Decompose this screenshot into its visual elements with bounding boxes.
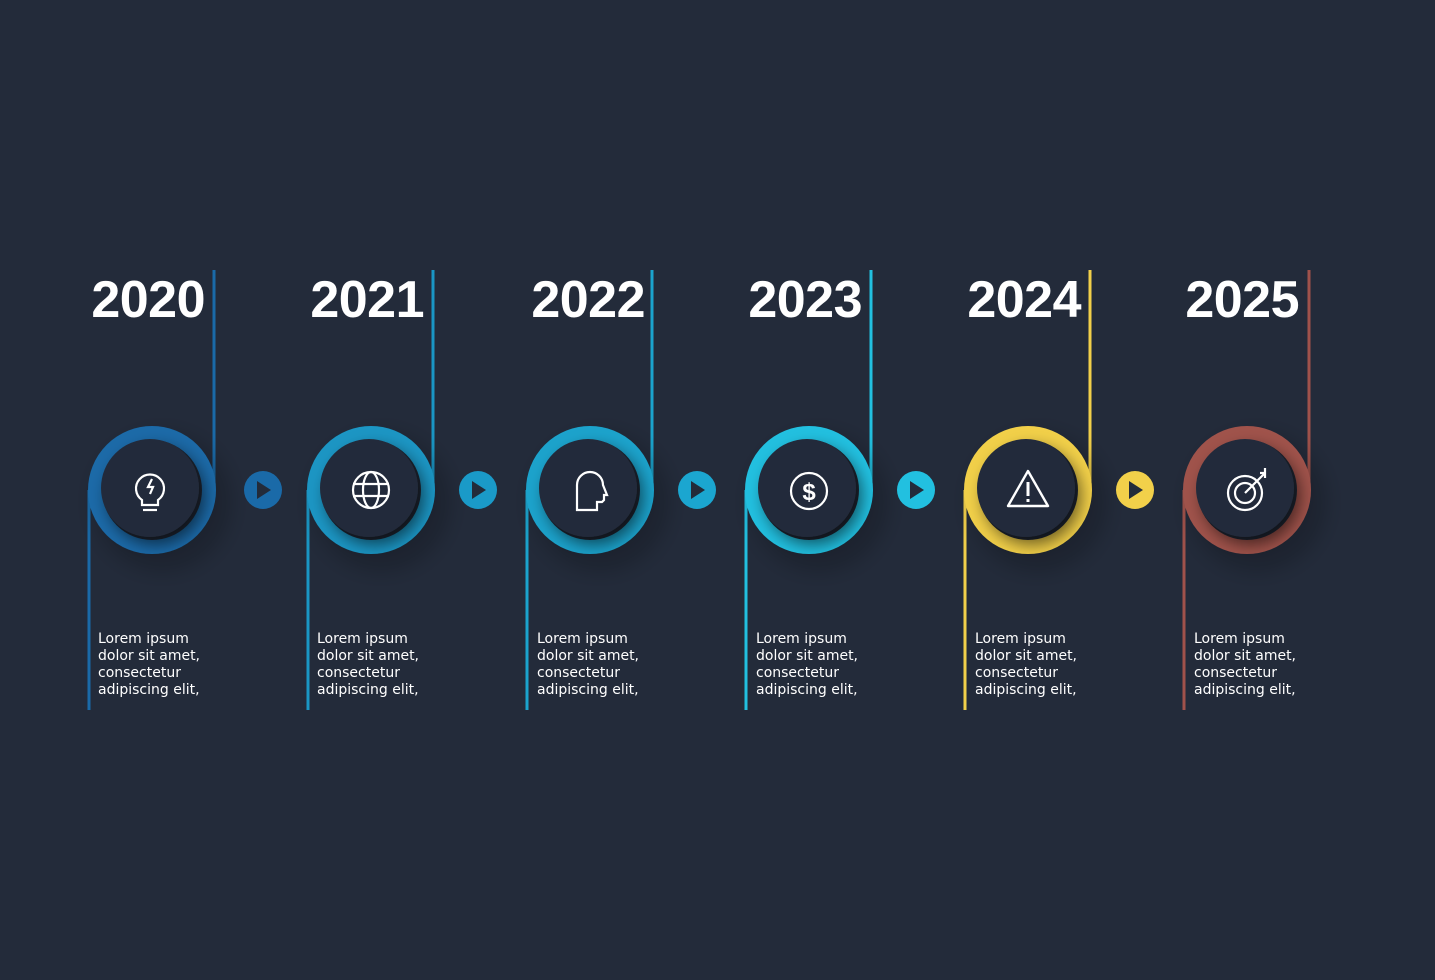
icon: warning bbox=[1008, 471, 1048, 506]
text 2021: adipiscing elit, bbox=[317, 682, 419, 698]
arrow 5 bbox=[1116, 471, 1154, 509]
year 2025: 2025 bbox=[1185, 271, 1299, 329]
text 2025: adipiscing elit, bbox=[1194, 682, 1296, 698]
text 2023: adipiscing elit, bbox=[756, 682, 858, 698]
ring 2023 bbox=[746, 270, 871, 710]
text 2025: Lorem ipsum bbox=[1194, 631, 1285, 647]
year 2021: 2021 bbox=[310, 271, 424, 329]
year 2023: 2023 bbox=[748, 271, 862, 329]
icon: lightbulb bbox=[136, 475, 164, 510]
text 2020: consectetur bbox=[98, 665, 181, 681]
text 2021: consectetur bbox=[317, 665, 400, 681]
step 2024 bbox=[965, 270, 1090, 710]
text 2023: consectetur bbox=[756, 665, 839, 681]
text 2022: adipiscing elit, bbox=[537, 682, 639, 698]
icon: dollar: $ bbox=[802, 479, 816, 506]
text 2020: dolor sit amet, bbox=[98, 648, 200, 664]
icon: dollar bbox=[791, 473, 827, 509]
text 2022: consectetur bbox=[537, 665, 620, 681]
arrow 3 bbox=[678, 471, 716, 509]
text 2022: Lorem ipsum bbox=[537, 631, 628, 647]
text 2020: adipiscing elit, bbox=[98, 682, 200, 698]
text 2025: dolor sit amet, bbox=[1194, 648, 1296, 664]
text 2024: dolor sit amet, bbox=[975, 648, 1077, 664]
step 2022 bbox=[527, 270, 652, 710]
ring 2020 bbox=[89, 270, 214, 710]
text 2024: consectetur bbox=[975, 665, 1058, 681]
arrow 1 bbox=[244, 471, 282, 509]
text 2024: Lorem ipsum bbox=[975, 631, 1066, 647]
ring 2025 bbox=[1184, 270, 1309, 710]
text 2023: Lorem ipsum bbox=[756, 631, 847, 647]
arrow 2 bbox=[459, 471, 497, 509]
step 2021 bbox=[308, 270, 433, 710]
icon: target bbox=[1228, 468, 1265, 510]
year 2022: 2022 bbox=[531, 271, 645, 329]
year 2024: 2024 bbox=[967, 271, 1082, 329]
ring 2024 bbox=[965, 270, 1090, 710]
step 2025 bbox=[1184, 270, 1309, 710]
step 2020 bbox=[89, 270, 214, 710]
text 2021: Lorem ipsum bbox=[317, 631, 408, 647]
icon: head bbox=[577, 472, 607, 510]
arrow 4 bbox=[897, 471, 935, 509]
text 2022: dolor sit amet, bbox=[537, 648, 639, 664]
ring 2021 bbox=[308, 270, 433, 710]
text 2023: dolor sit amet, bbox=[756, 648, 858, 664]
ring 2022 bbox=[527, 270, 652, 710]
text 2020: Lorem ipsum bbox=[98, 631, 189, 647]
step 2023 bbox=[746, 270, 871, 710]
text 2025: consectetur bbox=[1194, 665, 1277, 681]
text 2024: adipiscing elit, bbox=[975, 682, 1077, 698]
year 2020: 2020 bbox=[91, 271, 205, 329]
icon: globe bbox=[353, 472, 389, 508]
text 2021: dolor sit amet, bbox=[317, 648, 419, 664]
